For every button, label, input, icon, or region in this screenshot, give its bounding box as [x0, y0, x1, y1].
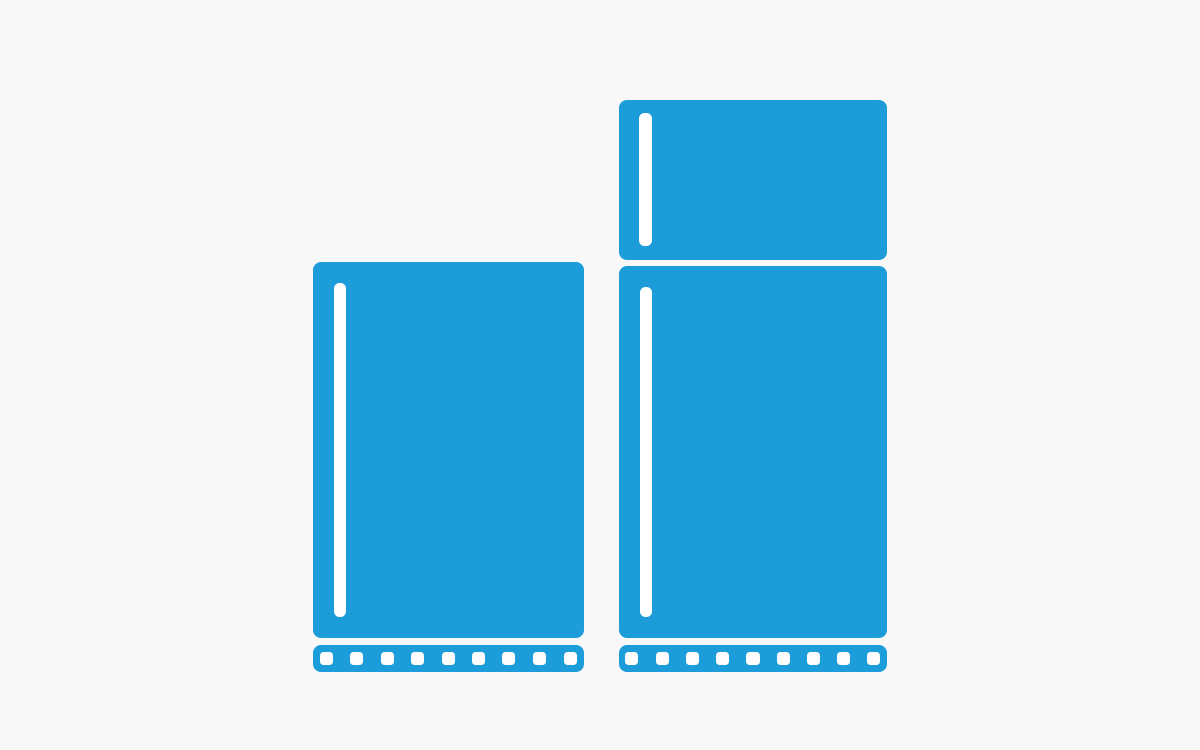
base: vented base with nine slots: [619, 645, 887, 672]
door: fridge compartment: [619, 266, 887, 638]
handle: fridge handle: [640, 287, 652, 617]
door: single door body: [313, 262, 584, 638]
base: vented base with nine slots: [313, 645, 584, 672]
handle: single door handle: [334, 283, 346, 617]
door: freezer compartment: [619, 100, 887, 260]
icon: two-door refrigerator: [619, 100, 887, 672]
handle: freezer handle: [639, 113, 652, 246]
icon: single-door refrigerator: [313, 262, 584, 672]
